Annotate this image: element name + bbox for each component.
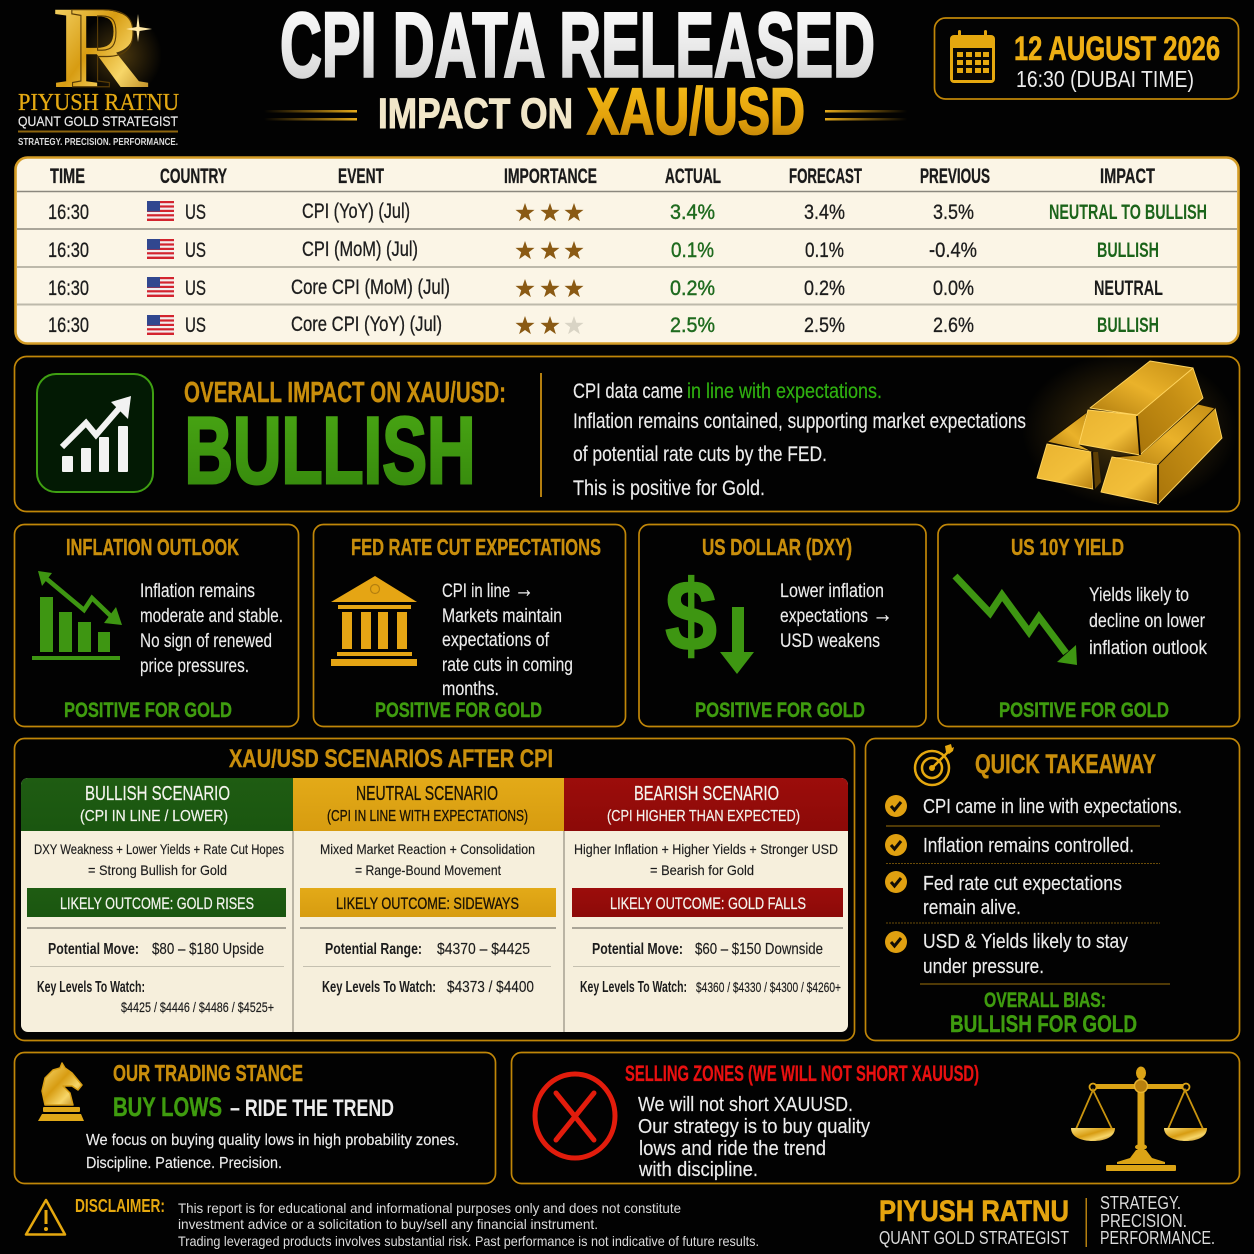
row: Core CPI MoM: 0.2%: [804, 277, 845, 300]
row: CPI YoY: 16:30: [48, 201, 89, 224]
icon: falling yield: [955, 576, 1077, 665]
row: Core CPI MoM: 0.2%: [670, 277, 715, 300]
body text: USD weakens: [780, 631, 880, 652]
scenario: bullish: = Strong Bullish for Gold: [88, 862, 227, 878]
panel: us dollar: [639, 524, 926, 726]
panel: scenarios after CPI: [14, 738, 854, 1040]
overall bias: OVERALL BIAS:: [984, 989, 1106, 1012]
takeaway list: CPI came in line with expectations.: [923, 796, 1182, 818]
subtitle: impact on XAU/USD: [264, 74, 907, 148]
selling text: [638, 1094, 870, 1181]
body text: price pressures.: [140, 656, 249, 677]
body text: [140, 581, 283, 677]
row: Core CPI MoM: 16:30: [48, 277, 89, 300]
scenario: neutral: = Range-Bound Movement: [355, 862, 501, 878]
heading: SELLING ZONES (WE WILL NOT SHORT XAUUSD): [625, 1061, 979, 1086]
row: CPI MoM: BULLISH: [1097, 239, 1159, 262]
row: CPI YoY: US: [185, 201, 206, 224]
icon: dollar down: $: [665, 560, 717, 672]
takeaway list: [885, 795, 1182, 984]
scenario: neutral: (CPI IN LINE WITH EXPECTATIONS): [327, 808, 528, 825]
scenario: neutral: LIKELY OUTCOME: SIDEWAYS: [336, 894, 519, 913]
selling text: with discipline.: [638, 1159, 758, 1181]
row: Core CPI YoY: 2.6%: [933, 314, 974, 337]
stance text: [86, 1132, 459, 1172]
row: CPI YoY: CPI (YoY) (Jul): [302, 200, 410, 223]
takeaway list: Fed rate cut expectations: [923, 873, 1122, 895]
body text: inflation outlook: [1089, 638, 1207, 659]
heading: US DOLLAR (DXY): [702, 534, 852, 560]
icon: red cross: [535, 1074, 615, 1158]
footer brand: PERFORMANCE.: [1100, 1228, 1215, 1248]
scenario: neutral: [293, 778, 564, 996]
subtitle: impact on XAU/USD: XAU/USD: [587, 74, 805, 148]
impact explanation: in line with expectations.: [687, 380, 882, 403]
heading: FED RATE CUT EXPECTATIONS: [351, 534, 601, 560]
logo: Piyush Ratnu: [18, 0, 179, 148]
icon: calendar: [950, 30, 995, 83]
row: CPI YoY: 3.4%: [804, 201, 845, 224]
disclaimer: [26, 1196, 759, 1249]
body text: decline on lower: [1089, 611, 1206, 632]
heading: OUR TRADING STANCE: [113, 1060, 303, 1086]
scenario: bearish: Higher Inflation + Higher Yields + Stronger USD: [574, 841, 838, 857]
icon: bank: [331, 576, 417, 666]
row: CPI MoM: 0.1%: [805, 239, 844, 262]
date box: [934, 18, 1238, 99]
row: Core CPI YoY: [48, 313, 1159, 337]
subtitle: impact on XAU/USD: IMPACT ON: [378, 90, 573, 138]
panel: quick takeaway: [866, 738, 1240, 1040]
body text: moderate and stable.: [140, 606, 283, 627]
body text: expectations →: [780, 600, 893, 628]
scenario: bearish: [564, 778, 848, 996]
scenario: bearish: = Bearish for Gold: [650, 862, 754, 878]
panel: overall impact: [14, 352, 1240, 512]
disclaimer text: investment advice or a solicitation to buy/sell any financial instrument.: [178, 1216, 598, 1232]
scenario: bearish: Key Levels To Watch:: [580, 979, 687, 996]
row: Core CPI YoY: BULLISH: [1097, 314, 1159, 337]
stance: – RIDE THE TREND: [230, 1095, 394, 1122]
selling text: We will not short XAUUSD.: [638, 1094, 853, 1116]
verdict: POSITIVE FOR GOLD: [64, 699, 232, 722]
takeaway list: under pressure.: [923, 956, 1044, 978]
scenario: neutral: Potential Range:: [325, 941, 422, 958]
bullish verdict: BULLISH: [184, 398, 476, 504]
row: CPI MoM: CPI (MoM) (Jul): [302, 238, 418, 261]
scenario: bullish: Key Levels To Watch:: [37, 979, 145, 996]
body text: rate cuts in coming: [442, 655, 573, 676]
body text: Yields likely to: [1089, 585, 1189, 606]
row: Core CPI YoY: US: [185, 314, 206, 337]
impact explanation: CPI data came: [573, 380, 683, 403]
row: CPI YoY: [48, 200, 1207, 224]
scenario: bearish: (CPI HIGHER THAN EXPECTED): [607, 808, 800, 825]
body text: Markets maintain: [442, 606, 562, 627]
table header: PREVIOUS: [920, 165, 990, 188]
scenario: bearish: BEARISH SCENARIO: [634, 783, 779, 805]
impact explanation: This is positive for Gold.: [573, 477, 765, 500]
body text: months.: [442, 679, 499, 700]
stance: [113, 1092, 394, 1122]
row: Core CPI YoY: Core CPI (YoY) (Jul): [291, 313, 442, 336]
scenario: bullish: $80 – $180 Upside: [152, 941, 264, 958]
disclaimer text: Trading leveraged products involves substantial risk. Past performance is not indicative of future results.: [178, 1233, 759, 1249]
table header: EVENT: [338, 165, 384, 188]
heading: US 10Y YIELD: [1011, 534, 1124, 560]
body text: Lower inflation: [780, 581, 884, 602]
scenario: neutral: $4373 / $4400: [447, 979, 534, 996]
row: Core CPI MoM: NEUTRAL: [1094, 277, 1163, 300]
icon: bullish chart: [37, 374, 153, 492]
row: CPI YoY: 3.4%: [670, 201, 715, 224]
scenario: neutral: Key Levels To Watch:: [322, 979, 436, 996]
row: Core CPI MoM: 0.0%: [933, 277, 974, 300]
logo monogram: [55, 9, 157, 92]
body text: No sign of renewed: [140, 631, 272, 652]
table header: COUNTRY: [160, 165, 227, 188]
logo name: PIYUSH RATNU: [18, 90, 179, 116]
footer brand: [879, 1193, 1215, 1248]
table header: IMPACT: [1100, 165, 1155, 188]
time: 16:30 (DUBAI TIME): [1016, 66, 1194, 92]
row: Core CPI MoM: [48, 276, 1163, 300]
footer brand: PRECISION.: [1100, 1211, 1187, 1231]
row: CPI MoM: US: [185, 239, 206, 262]
impact explanation: of potential rate cuts by the FED.: [573, 443, 827, 466]
footer brand: PIYUSH RATNU: [879, 1195, 1069, 1228]
takeaway list: Inflation remains controlled.: [923, 835, 1134, 857]
scenario: bullish: $4425 / $4446 / $4486 / $4525+: [121, 999, 274, 1015]
panel: fed rate cut expectations: [314, 524, 626, 726]
icon: dollar down: [665, 560, 754, 674]
table header: TIME: [50, 165, 85, 188]
verdict: POSITIVE FOR GOLD: [695, 699, 865, 722]
body text: expectations of: [442, 630, 550, 651]
icon: warning triangle: [26, 1200, 65, 1234]
heading: QUICK TAKEAWAY: [975, 749, 1156, 779]
impact explanation: Inflation remains contained, supporting market expectations: [573, 410, 1026, 433]
stance: BUY LOWS: [113, 1092, 222, 1122]
overall bias: [950, 989, 1137, 1038]
row: Core CPI YoY: 16:30: [48, 314, 89, 337]
scenario: bullish: DXY Weakness + Lower Yields + Rate Cut Hopes: [34, 841, 284, 857]
scenario: bullish: BULLISH SCENARIO: [85, 783, 230, 805]
takeaway list: USD & Yields likely to stay: [923, 931, 1128, 953]
row: Core CPI MoM: US: [185, 277, 206, 300]
body text: [780, 581, 893, 652]
row: CPI MoM: 16:30: [48, 239, 89, 262]
icon: falling bars: [32, 571, 122, 660]
stance text: We focus on buying quality lows in high probability zones.: [86, 1132, 459, 1149]
table header: ACTUAL: [665, 165, 721, 188]
disclaimer text: This report is for educational and informational purposes only and does not constitute: [178, 1200, 681, 1216]
panel: us 10y yield: [938, 524, 1240, 726]
row: CPI MoM: [48, 238, 1159, 262]
logo tagline: STRATEGY. PRECISION. PERFORMANCE.: [18, 137, 178, 148]
overall impact label: OVERALL IMPACT ON XAU/USD:: [184, 377, 506, 409]
scenario: neutral: NEUTRAL SCENARIO: [356, 783, 498, 805]
scenario: bullish: (CPI IN LINE / LOWER): [80, 808, 228, 825]
stance text: Discipline. Patience. Precision.: [86, 1155, 282, 1172]
scenario: neutral: $4370 – $4425: [437, 941, 530, 958]
table header: FORECAST: [789, 165, 862, 188]
table header: IMPORTANCE: [504, 165, 597, 188]
icon: gold scales: [1071, 1066, 1207, 1171]
overall bias: BULLISH FOR GOLD: [950, 1011, 1137, 1038]
verdict: POSITIVE FOR GOLD: [375, 699, 542, 722]
icon: target: [915, 744, 954, 785]
disclaimer label: DISCLAIMER:: [75, 1196, 165, 1216]
row: Core CPI YoY: 2.5%: [804, 314, 845, 337]
heading: INFLATION OUTLOOK: [66, 534, 239, 560]
scenario: bearish: LIKELY OUTCOME: GOLD FALLS: [610, 894, 806, 913]
row: Core CPI YoY: 2.5%: [670, 314, 715, 337]
scenario: bearish: $4360 / $4330 / $4300 / $4260+: [696, 979, 841, 995]
icon: chess knight: [38, 1063, 84, 1121]
heading: XAU/USD SCENARIOS AFTER CPI: [229, 745, 553, 773]
scenario: bullish: Potential Move:: [48, 941, 139, 958]
icon: gold bars: [1022, 352, 1238, 508]
scenario: bullish: LIKELY OUTCOME: GOLD RISES: [60, 894, 254, 913]
body text: CPI in line →: [442, 575, 534, 603]
selling text: Our strategy is to buy quality: [638, 1116, 870, 1138]
impact explanation: [573, 380, 1026, 500]
panel: trading stance: [14, 1052, 496, 1184]
takeaway list: remain alive.: [923, 897, 1021, 919]
verdict: POSITIVE FOR GOLD: [999, 699, 1169, 722]
body text: [1089, 585, 1207, 659]
panel: selling zones: [512, 1052, 1240, 1184]
panel: inflation outlook: [14, 524, 298, 726]
selling text: lows and ride the trend: [639, 1138, 826, 1160]
row: Core CPI MoM: Core CPI (MoM) (Jul): [291, 276, 450, 299]
row: CPI MoM: 0.1%: [671, 239, 714, 262]
row: CPI MoM: -0.4%: [929, 239, 977, 262]
disclaimer text: [178, 1200, 759, 1249]
scenario: bearish: $60 – $150 Downside: [695, 941, 823, 958]
scenario: bullish: [21, 778, 293, 1015]
footer brand: STRATEGY.: [1100, 1193, 1181, 1213]
row: CPI YoY: 3.5%: [933, 201, 974, 224]
table header: [50, 165, 1155, 188]
footer brand: QUANT GOLD STRATEGIST: [879, 1228, 1069, 1248]
scenario: neutral: Mixed Market Reaction + Consolidation: [320, 841, 535, 857]
logo role: QUANT GOLD STRATEGIST: [18, 113, 178, 129]
body text: [442, 575, 573, 700]
panel: economic calendar table: [16, 158, 1238, 344]
scenario: bearish: Potential Move:: [592, 941, 683, 958]
body text: Inflation remains: [140, 581, 255, 602]
